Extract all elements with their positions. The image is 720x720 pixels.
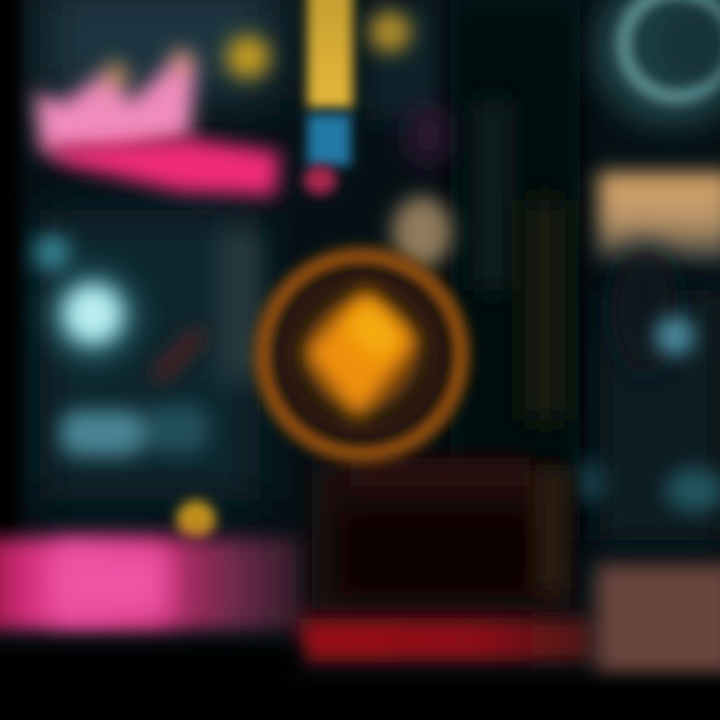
red smudge (150, 325, 208, 386)
pink blob (303, 165, 337, 195)
background colour regions (0, 0, 720, 540)
blue bar (307, 114, 351, 166)
purple smudge (406, 105, 450, 165)
yellow dot right (369, 11, 411, 53)
teal lozenge (60, 405, 208, 456)
pink floor band (0, 538, 305, 630)
gold coin (264, 257, 460, 453)
tan blob (392, 196, 452, 268)
red floor band (300, 618, 595, 662)
yellow vertical bar (307, 0, 353, 108)
black bottom strip (0, 645, 720, 720)
teal ring top right (592, 0, 720, 128)
mauve panel (596, 564, 720, 684)
dark pedestal box (312, 458, 570, 610)
small teal dot (33, 234, 71, 272)
glowing white dot (49, 271, 137, 359)
teal blobs right (572, 460, 720, 512)
pink crown (34, 49, 196, 152)
yellow dot top (226, 35, 270, 79)
small yellow dot (176, 500, 216, 540)
hot pink bar (44, 138, 280, 196)
dark figure on the right (611, 245, 679, 375)
light blue dot right (655, 316, 695, 356)
tan panel (598, 172, 720, 262)
